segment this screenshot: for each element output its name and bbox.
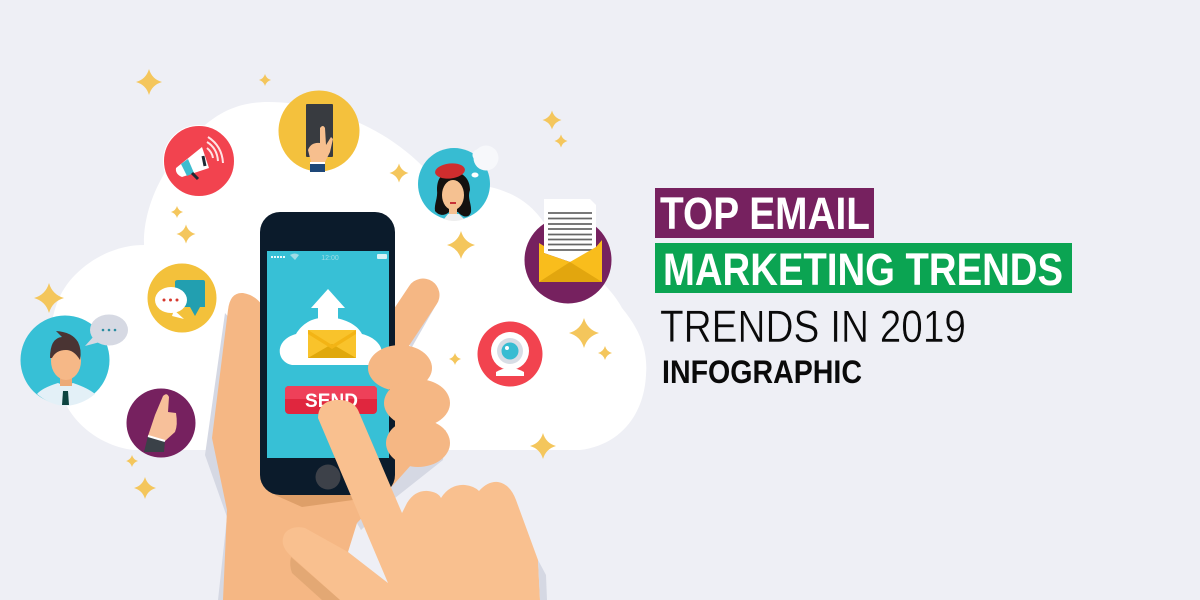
infographic label: INFOGRAPHIC [662, 354, 862, 390]
phone: 12:00 [321, 255, 339, 262]
cloud background [51, 102, 646, 450]
send button: SEND [305, 391, 358, 412]
hand holding phone [205, 293, 446, 600]
pointing hand [283, 400, 547, 600]
icon: webcam [478, 322, 542, 386]
icon: woman with thought bubble [418, 146, 498, 221]
title line 2: MARKETING TRENDS [663, 244, 1063, 295]
icon: thumbs up [126, 388, 196, 458]
sparkle stars [34, 69, 612, 499]
phone [260, 212, 395, 495]
icon: chat bubbles [148, 264, 216, 332]
icon: megaphone [164, 126, 234, 196]
icon: envelope with letter [524, 199, 612, 304]
title line 1: TOP EMAIL [660, 188, 870, 239]
gripping fingers [368, 345, 450, 467]
title block [655, 188, 1072, 390]
send button [285, 386, 377, 414]
subtitle: TRENDS IN 2019 [660, 301, 966, 352]
home button [316, 464, 340, 490]
cloud upload graphic [280, 289, 382, 365]
icon: finger on phone [278, 90, 360, 172]
phone screen [267, 251, 389, 458]
icon: man with speech bubble [20, 314, 128, 406]
